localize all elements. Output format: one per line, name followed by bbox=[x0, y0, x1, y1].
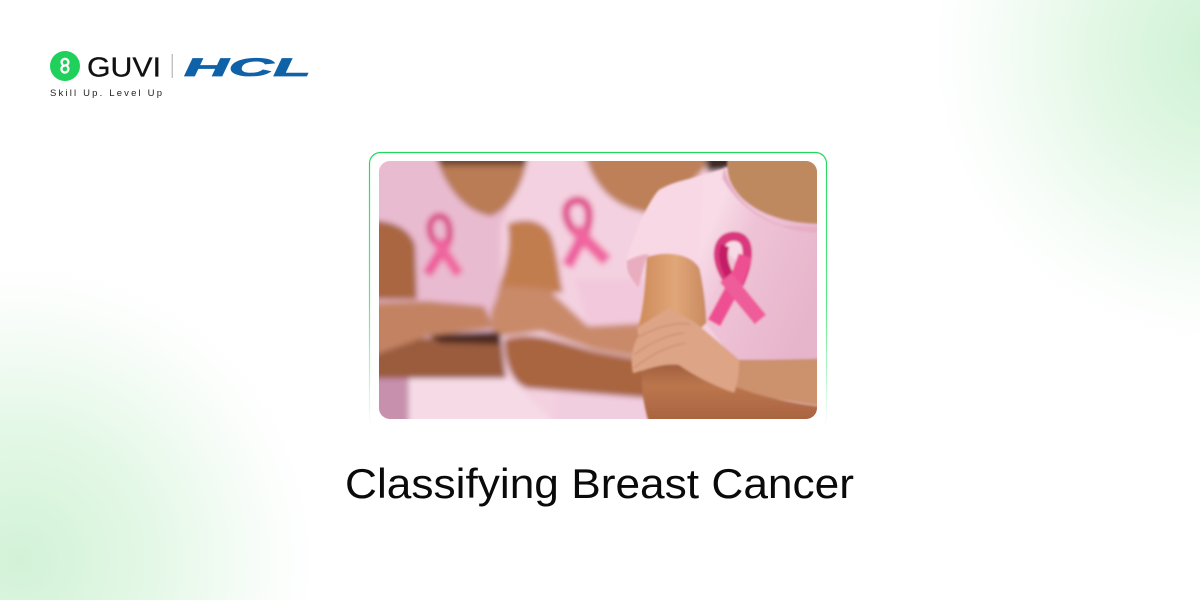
GUVI wordmark: GUVI bbox=[87, 52, 161, 82]
tagline: Skill Up. Level Up bbox=[50, 88, 162, 99]
front woman bbox=[625, 158, 826, 427]
panel: photo card frame bbox=[370, 152, 826, 428]
middle ribbon bbox=[566, 200, 607, 266]
right ribbon bbox=[728, 240, 744, 260]
HCL wordmark: HCL bbox=[184, 54, 311, 82]
photo: three women wearing pink ribbons bbox=[379, 161, 817, 419]
logo: GUVI and HCL bbox=[50, 51, 311, 99]
icon: GUVI green circle bbox=[50, 51, 80, 81]
left ribbon bbox=[427, 216, 459, 274]
back row blurred bbox=[379, 161, 729, 419]
title: Classifying Breast Cancer bbox=[345, 460, 854, 507]
